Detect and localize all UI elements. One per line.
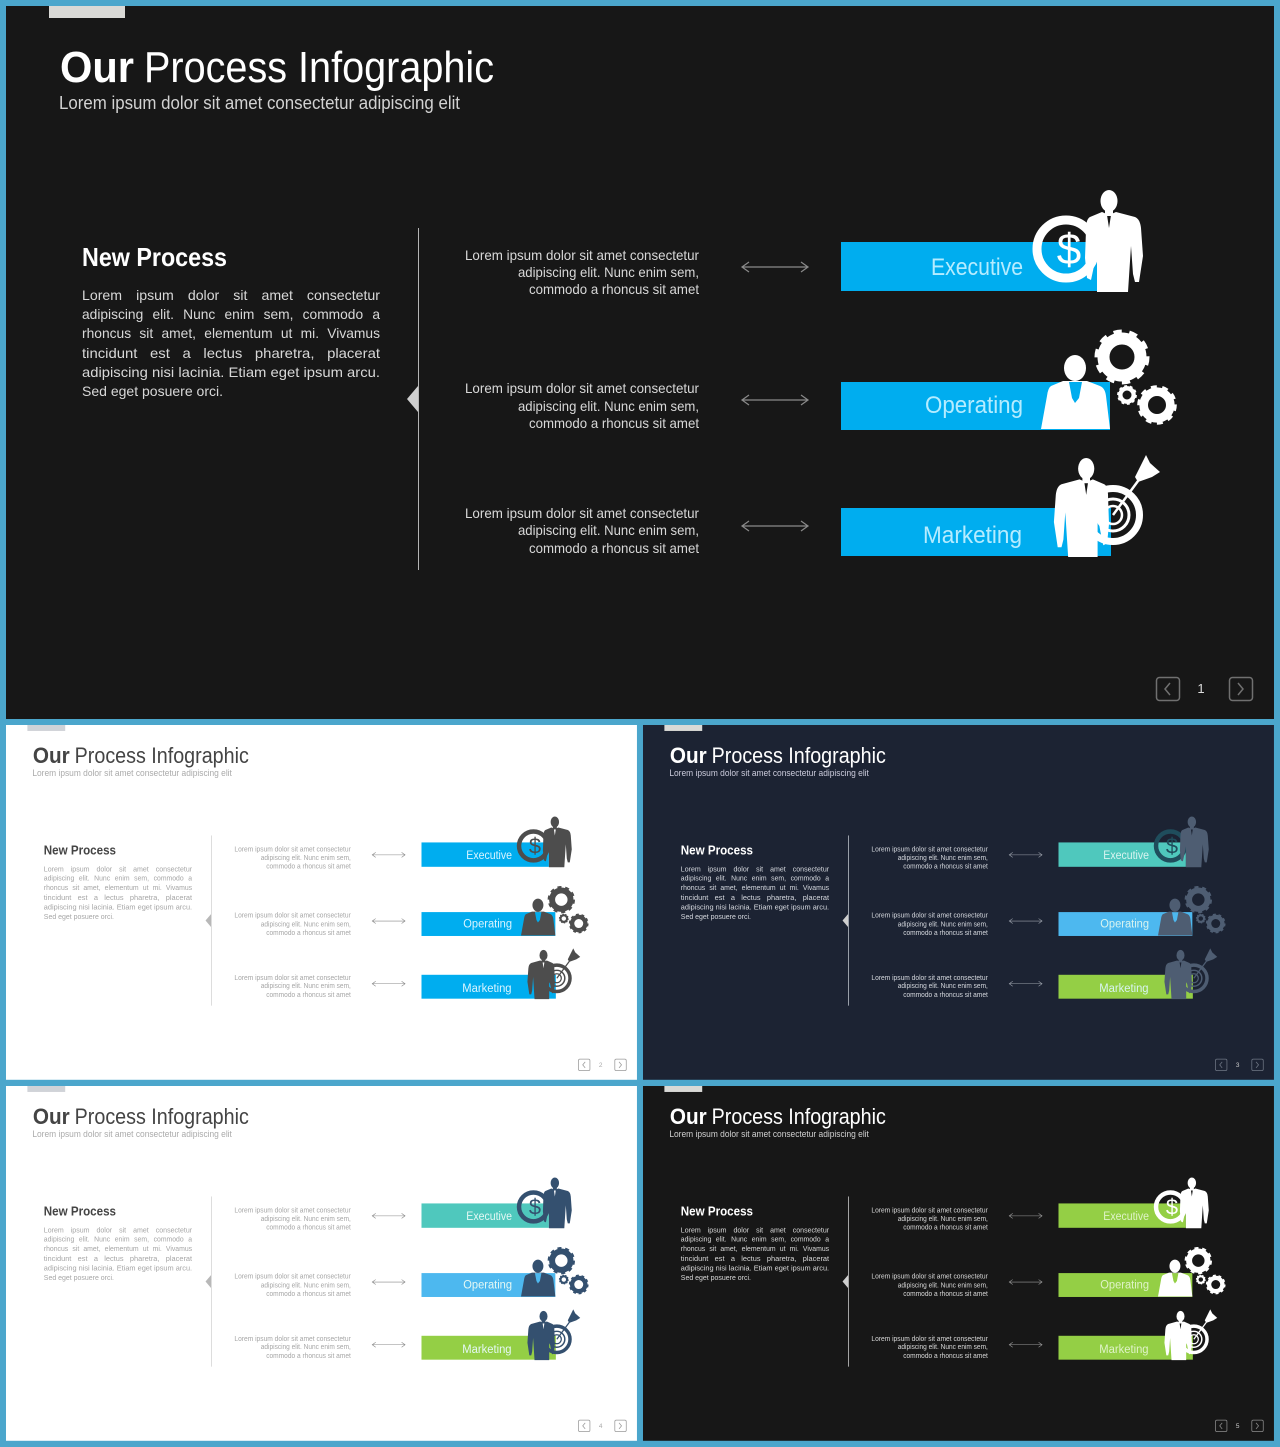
slide 5: black slide with green bars <box>643 1086 1274 1441</box>
bar: Marketing: Marketing <box>1099 1342 1149 1356</box>
bar: Executive <box>841 242 1097 291</box>
text block 3 <box>871 1336 988 1360</box>
top tab <box>27 1086 65 1092</box>
paragraph: Lorem ipsum dolor sit amet consectetur <box>44 866 193 873</box>
icon: marketer with target <box>527 948 580 999</box>
pagination: 1 <box>1197 681 1205 696</box>
text block 3: commodo a rhoncus sit amet <box>266 1353 351 1360</box>
arrow 2 <box>372 919 405 924</box>
arrow 1 <box>1009 1213 1042 1218</box>
heading: New Process: New Process <box>681 1203 753 1218</box>
paragraph <box>44 866 193 921</box>
text block 2: Lorem ipsum dolor sit amet consectetur <box>465 380 699 396</box>
text block 1 <box>234 1207 351 1231</box>
bar: Marketing: Marketing <box>1099 981 1149 995</box>
subtitle: Lorem ipsum dolor sit amet consectetur adipiscing elit <box>669 768 869 778</box>
title: Process Infographic <box>75 1104 249 1129</box>
slide 3: navy slide with multicolour bars <box>643 725 1274 1080</box>
paragraph: adipiscing elit. Nunc enim sem, commodo a <box>44 876 192 883</box>
text block 2: adipiscing elit. Nunc enim sem, <box>518 398 699 414</box>
title: Our <box>33 1104 70 1129</box>
text block 1 <box>234 846 351 870</box>
bar: Marketing <box>1058 975 1193 999</box>
icon: executive with coin: $ <box>1166 1194 1178 1219</box>
subtitle: Lorem ipsum dolor sit amet consectetur adipiscing elit <box>32 768 232 778</box>
pagination <box>1156 678 1252 700</box>
arrow 3 <box>1009 1342 1042 1347</box>
divider line with pointer <box>843 835 849 1006</box>
text block 2: adipiscing elit. Nunc enim sem, <box>261 1283 351 1290</box>
paragraph: adipiscing nisi lacinia. Etiam eget ipsum arcu. <box>82 364 380 380</box>
text block 2: commodo a rhoncus sit amet <box>266 1291 351 1298</box>
text block 3: commodo a rhoncus sit amet <box>266 992 351 999</box>
bar: Marketing: Marketing <box>462 1342 512 1356</box>
paragraph: rhoncus sit amet, elementum ut mi. Vivamus <box>681 1246 830 1253</box>
pagination: 2 <box>599 1062 603 1069</box>
bar: Marketing <box>1058 1336 1193 1360</box>
icon: marketer with target <box>1164 1309 1217 1360</box>
slide 2: white slide with blue bars <box>6 725 637 1080</box>
paragraph: Sed eget posuere orci. <box>82 383 223 399</box>
slide 1: large black slide <box>6 6 1274 719</box>
text block 1: adipiscing elit. Nunc enim sem, <box>261 1216 351 1223</box>
icon: executive with coin: $ <box>529 1194 541 1219</box>
icon: executive with coin: $ <box>1166 833 1178 858</box>
title: Our <box>670 1104 707 1129</box>
text block 3: commodo a rhoncus sit amet <box>529 540 699 556</box>
text block 3: Lorem ipsum dolor sit amet consectetur <box>465 505 699 521</box>
text block 1: adipiscing elit. Nunc enim sem, <box>898 855 988 862</box>
subtitle: Lorem ipsum dolor sit amet consectetur adipiscing elit <box>59 93 460 113</box>
arrow 3 <box>372 1342 405 1347</box>
title: Our <box>33 743 70 768</box>
text block 2 <box>465 380 699 431</box>
bar: Executive <box>421 1203 549 1228</box>
text block 1: adipiscing elit. Nunc enim sem, <box>261 855 351 862</box>
icon: marketer with target <box>527 1309 580 1360</box>
title: Process Infographic <box>712 743 886 768</box>
bar: Operating: Operating <box>925 392 1023 419</box>
bar: Executive: Executive <box>931 254 1023 281</box>
arrow 1 <box>372 1213 405 1218</box>
title: Our <box>60 43 134 92</box>
arrow 3 <box>372 981 405 986</box>
icon: executive with coin <box>519 817 572 867</box>
arrow 3 <box>1009 981 1042 986</box>
paragraph: adipiscing elit. Nunc enim sem, commodo a <box>681 1237 829 1244</box>
paragraph: adipiscing elit. Nunc enim sem, commodo a <box>681 876 829 883</box>
bar: Marketing: Marketing <box>923 522 1022 549</box>
pagination <box>578 1420 626 1432</box>
pagination <box>578 1059 626 1071</box>
slide background <box>6 1086 637 1441</box>
text block 3: commodo a rhoncus sit amet <box>903 992 988 999</box>
text block 2: Lorem ipsum dolor sit amet consectetur <box>871 1274 988 1281</box>
paragraph: tincidunt est a lectus pharetra, placerat <box>44 895 192 902</box>
paragraph: tincidunt est a lectus pharetra, placerat <box>681 1256 829 1263</box>
heading: New Process: New Process <box>681 842 753 857</box>
text block 2: Lorem ipsum dolor sit amet consectetur <box>234 913 351 920</box>
text block 3: Lorem ipsum dolor sit amet consectetur <box>871 1336 988 1343</box>
text block 1: commodo a rhoncus sit amet <box>903 1224 988 1231</box>
text block 3: adipiscing elit. Nunc enim sem, <box>518 522 699 538</box>
text block 1: Lorem ipsum dolor sit amet consectetur <box>234 846 351 853</box>
text block 1: commodo a rhoncus sit amet <box>266 863 351 870</box>
text block 1: Lorem ipsum dolor sit amet consectetur <box>871 846 988 853</box>
bar: Executive <box>421 842 549 867</box>
bar: Operating: Operating <box>1100 917 1149 931</box>
bar: Executive <box>1058 842 1186 867</box>
arrow 3 <box>742 521 808 531</box>
pagination: 3 <box>1236 1062 1240 1069</box>
paragraph: Lorem ipsum dolor sit amet consectetur <box>44 1227 193 1234</box>
paragraph: rhoncus sit amet, elementum ut mi. Vivamus <box>681 885 830 892</box>
paragraph: adipiscing nisi lacinia. Etiam eget ipsum arcu. <box>681 1266 829 1273</box>
paragraph: tincidunt est a lectus pharetra, placerat <box>82 345 380 361</box>
title: Process Infographic <box>712 1104 886 1129</box>
slide background <box>643 725 1274 1080</box>
arrow 1 <box>372 852 405 857</box>
slide background <box>643 1086 1274 1441</box>
divider line with pointer <box>206 1196 212 1367</box>
text block 1: Lorem ipsum dolor sit amet consectetur <box>871 1207 988 1214</box>
bar: Marketing <box>841 508 1111 556</box>
text block 3: adipiscing elit. Nunc enim sem, <box>898 983 988 990</box>
paragraph: adipiscing nisi lacinia. Etiam eget ipsum arcu. <box>681 905 829 912</box>
icon: executive with coin <box>1156 817 1209 867</box>
paragraph: Lorem ipsum dolor sit amet consectetur <box>681 1227 830 1234</box>
paragraph <box>681 1227 830 1282</box>
top tab <box>664 725 702 731</box>
bar: Operating: Operating <box>463 1278 512 1292</box>
text block 3 <box>234 1336 351 1360</box>
text block 1 <box>871 1207 988 1231</box>
text block 1: commodo a rhoncus sit amet <box>266 1224 351 1231</box>
bar: Executive: Executive <box>1103 848 1149 862</box>
paragraph: tincidunt est a lectus pharetra, placerat <box>681 895 829 902</box>
paragraph: rhoncus sit amet, elementum ut mi. Vivamus <box>44 1246 193 1253</box>
slide background <box>6 725 637 1080</box>
divider line with pointer <box>206 835 212 1006</box>
text block 1: adipiscing elit. Nunc enim sem, <box>518 264 699 280</box>
title: Process Infographic <box>144 43 494 92</box>
text block 2: commodo a rhoncus sit amet <box>903 1291 988 1298</box>
bar: Executive: Executive <box>466 1209 512 1223</box>
paragraph: Lorem ipsum dolor sit amet consectetur <box>681 866 830 873</box>
arrow 2 <box>1009 919 1042 924</box>
paragraph <box>44 1227 193 1282</box>
text block 3: adipiscing elit. Nunc enim sem, <box>261 983 351 990</box>
heading: New Process: New Process <box>44 1203 116 1218</box>
icon: operator with gears <box>521 1248 588 1296</box>
text block 2 <box>871 913 988 937</box>
bar: Marketing <box>421 1336 556 1360</box>
text block 2: adipiscing elit. Nunc enim sem, <box>261 922 351 929</box>
bar: Operating <box>1058 912 1192 936</box>
paragraph: Sed eget posuere orci. <box>681 1275 751 1282</box>
text block 2: commodo a rhoncus sit amet <box>529 415 699 431</box>
bar: Marketing <box>421 975 556 999</box>
icon: marketer with target <box>1164 948 1217 999</box>
icon: operator with gears <box>1041 332 1175 429</box>
icon: operator with gears <box>1158 887 1225 935</box>
pagination: 4 <box>599 1423 603 1430</box>
title: Our <box>670 743 707 768</box>
title: Process Infographic <box>75 743 249 768</box>
paragraph: Sed eget posuere orci. <box>681 914 751 921</box>
text block 2: Lorem ipsum dolor sit amet consectetur <box>871 913 988 920</box>
text block 3: Lorem ipsum dolor sit amet consectetur <box>234 975 351 982</box>
arrow 2 <box>1009 1280 1042 1285</box>
text block 3: Lorem ipsum dolor sit amet consectetur <box>234 1336 351 1343</box>
paragraph: Sed eget posuere orci. <box>44 1275 114 1282</box>
text block 1: Lorem ipsum dolor sit amet consectetur <box>234 1207 351 1214</box>
text block 1: commodo a rhoncus sit amet <box>529 281 699 297</box>
icon: operator with gears <box>1158 1248 1225 1296</box>
arrow 1 <box>1009 852 1042 857</box>
text block 3 <box>871 975 988 999</box>
text block 2 <box>871 1274 988 1298</box>
paragraph <box>82 287 380 399</box>
subtitle: Lorem ipsum dolor sit amet consectetur adipiscing elit <box>669 1129 869 1139</box>
heading: New Process: New Process <box>44 842 116 857</box>
pagination <box>1215 1059 1263 1071</box>
icon: executive with coin: $ <box>1057 225 1081 274</box>
slide background <box>6 6 1274 719</box>
text block 3: commodo a rhoncus sit amet <box>903 1353 988 1360</box>
top tab <box>664 1086 702 1092</box>
divider line with pointer <box>407 228 419 570</box>
arrow 1 <box>742 262 808 272</box>
bar: Operating <box>421 1273 555 1297</box>
bar: Operating <box>421 912 555 936</box>
icon: marketer with target <box>1054 455 1160 557</box>
bar: Marketing: Marketing <box>462 981 512 995</box>
arrow 2 <box>742 395 808 405</box>
text block 2: Lorem ipsum dolor sit amet consectetur <box>234 1274 351 1281</box>
arrow 2 <box>372 1280 405 1285</box>
slide 4: white slide with multicolour bars <box>6 1086 637 1441</box>
text block 2: adipiscing elit. Nunc enim sem, <box>898 1283 988 1290</box>
icon: executive with coin <box>1037 190 1143 292</box>
text block 3 <box>234 975 351 999</box>
paragraph <box>681 866 830 921</box>
paragraph: adipiscing nisi lacinia. Etiam eget ipsum arcu. <box>44 1266 192 1273</box>
paragraph: adipiscing elit. Nunc enim sem, commodo a <box>82 306 380 322</box>
paragraph: rhoncus sit amet, elementum ut mi. Vivamus <box>44 885 193 892</box>
heading: New Process: New Process <box>82 242 227 272</box>
text block 1 <box>465 247 699 297</box>
icon: operator with gears <box>521 887 588 935</box>
bar: Operating: Operating <box>463 917 512 931</box>
text block 3 <box>465 505 699 556</box>
subtitle: Lorem ipsum dolor sit amet consectetur adipiscing elit <box>32 1129 232 1139</box>
bar: Executive <box>1058 1203 1186 1228</box>
paragraph: tincidunt est a lectus pharetra, placerat <box>44 1256 192 1263</box>
bar: Executive: Executive <box>466 848 512 862</box>
bar: Operating <box>841 382 1110 430</box>
text block 2: commodo a rhoncus sit amet <box>903 930 988 937</box>
text block 3: Lorem ipsum dolor sit amet consectetur <box>871 975 988 982</box>
paragraph: Lorem ipsum dolor sit amet consectetur <box>82 287 380 303</box>
divider line with pointer <box>843 1196 849 1367</box>
paragraph: adipiscing nisi lacinia. Etiam eget ipsum arcu. <box>44 905 192 912</box>
icon: executive with coin: $ <box>529 833 541 858</box>
icon: executive with coin <box>519 1178 572 1228</box>
bar: Executive: Executive <box>1103 1209 1149 1223</box>
text block 3: adipiscing elit. Nunc enim sem, <box>898 1344 988 1351</box>
text block 1: adipiscing elit. Nunc enim sem, <box>898 1216 988 1223</box>
text block 2 <box>234 913 351 937</box>
text block 3: adipiscing elit. Nunc enim sem, <box>261 1344 351 1351</box>
paragraph: Sed eget posuere orci. <box>44 914 114 921</box>
paragraph: adipiscing elit. Nunc enim sem, commodo a <box>44 1237 192 1244</box>
paragraph: rhoncus sit amet, elementum ut mi. Vivamus <box>82 325 380 341</box>
top tab <box>49 6 125 18</box>
icon: executive with coin <box>1156 1178 1209 1228</box>
bar: Operating: Operating <box>1100 1278 1149 1292</box>
text block 1: commodo a rhoncus sit amet <box>903 863 988 870</box>
text block 2 <box>234 1274 351 1298</box>
text block 2: adipiscing elit. Nunc enim sem, <box>898 922 988 929</box>
text block 1: Lorem ipsum dolor sit amet consectetur <box>465 247 699 263</box>
text block 2: commodo a rhoncus sit amet <box>266 930 351 937</box>
bar: Operating <box>1058 1273 1192 1297</box>
pagination <box>1215 1420 1263 1432</box>
top tab <box>27 725 65 731</box>
text block 1 <box>871 846 988 870</box>
pagination: 5 <box>1236 1423 1240 1430</box>
